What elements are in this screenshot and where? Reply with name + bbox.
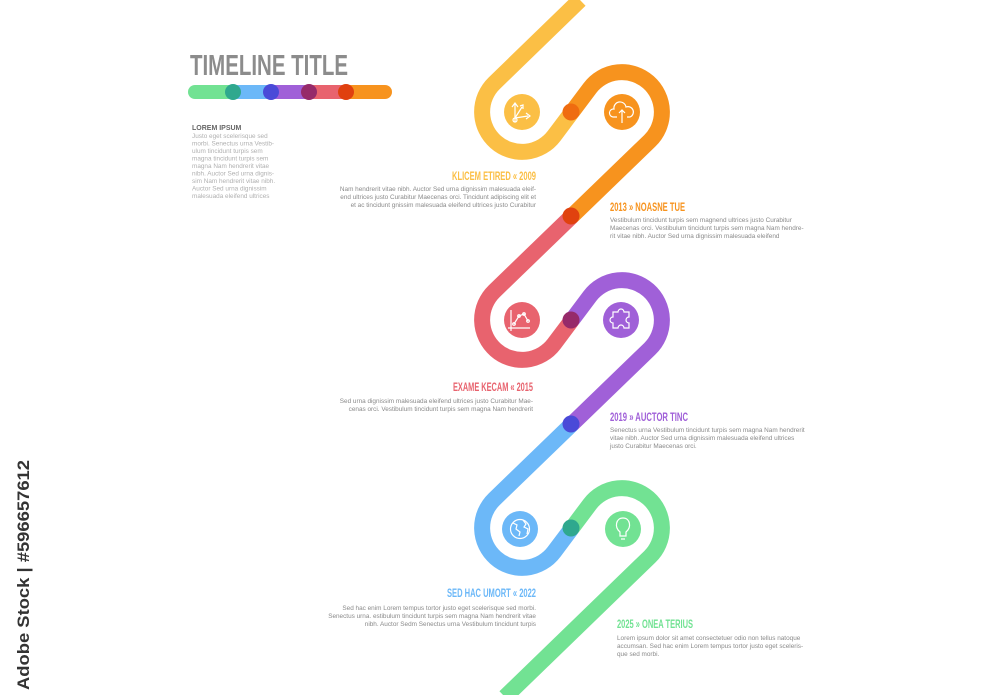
entry 2013: Maecenas orci. Vestibulum tincidunt turpis sem magna Nam hendre- bbox=[610, 225, 804, 232]
entry 2022: Senectus urna. estibulum tincidunt turpis sem magna Nam hendrerit vitae bbox=[328, 613, 536, 620]
entry 2015 bbox=[340, 380, 533, 413]
intro text block: ulum tincidunt turpis sem bbox=[192, 148, 263, 155]
entry 2025: 2025 » ONEA TERIUS bbox=[617, 617, 693, 631]
entry 2009 bbox=[340, 169, 537, 209]
entry 2019 bbox=[609, 410, 805, 450]
entry 2009: et ac tincidunt gnissim malesuada eleifend ultrices justo Curabitur bbox=[351, 202, 537, 209]
entry 2019: vitae nibh. Auctor Sed urna dignissim malesuada eleifend ultrices bbox=[610, 435, 794, 442]
icon: arrows (2009) bbox=[504, 94, 540, 130]
intro text block: Auctor Sed urna dignissim bbox=[192, 186, 267, 192]
icon: cloud upload (2013) bbox=[604, 94, 640, 130]
title: TIMELINE TITLE bbox=[190, 50, 348, 82]
intro text block: Justo eget scelerisque sed bbox=[192, 133, 268, 140]
entry 2019: 2019 » AUCTOR TINC bbox=[610, 410, 688, 424]
entry 2022: Sed hac enim Lorem tempus tortor justo eget scelerisque sed morbi. bbox=[342, 605, 536, 612]
entry 2025: Lorem ipsum dolor sit amet consectetuer odio non tellus natoque bbox=[617, 635, 801, 642]
side credit text: Adobe Stock | #596657612 bbox=[14, 460, 33, 690]
entry 2015: Sed urna dignissim malesuada eleifend ultrices justo Curabitur Mae- bbox=[340, 398, 533, 405]
icon: light bulb (2025) bbox=[605, 511, 641, 547]
entry 2022 bbox=[328, 586, 536, 628]
entry 2025 bbox=[617, 617, 803, 658]
entry 2015: EXAME KECAM « 2015 bbox=[453, 380, 533, 394]
intro text block: malesuada eleifend ultrices bbox=[192, 193, 269, 200]
entry 2022: SED HAC UMORT « 2022 bbox=[447, 586, 536, 600]
entry 2013: 2013 » NOASNE TUE bbox=[610, 200, 685, 214]
intro text block: LOREM IPSUM bbox=[192, 125, 242, 132]
entry 2015: cenas orci. Vestibulum tincidunt turpis sem magna Nam hendrerit bbox=[349, 406, 533, 413]
timeline path bbox=[482, 0, 662, 695]
intro text block bbox=[192, 125, 275, 200]
entry 2019: Senectus urna Vestibulum tincidunt turpis sem magna Nam hendrerit bbox=[610, 427, 805, 434]
entry 2019: justo Curabitur Maecenas orci. bbox=[609, 443, 697, 450]
entry 2025: accumsan. Sed hac enim Lorem tempus tortor justo eget sceleris- bbox=[617, 643, 803, 650]
entry 2013 bbox=[610, 200, 804, 240]
entry 2009: KLICEM ETIRED « 2009 bbox=[452, 169, 536, 183]
icon: chart (2015) bbox=[504, 302, 540, 338]
intro text block: sim Nam hendrerit vitae nibh. bbox=[192, 178, 275, 185]
entry 2013: rit vitae nibh. Auctor Sed urna dignissim malesuada eleifend bbox=[610, 233, 780, 240]
entry 2013: Vestibulum tincidunt turpis sem magnend ultrices justo Curabitur bbox=[610, 217, 793, 224]
icon: puzzle (2019) bbox=[603, 302, 639, 338]
icon: globe (2022) bbox=[502, 511, 538, 547]
entry 2009: end ultrices justo Curabitur Maecenas orci. Tincidunt adipiscing elit et bbox=[340, 194, 536, 201]
entry 2009: Nam hendrerit vitae nibh. Auctor Sed urna dignissim malesuada eleif- bbox=[340, 186, 536, 193]
entry 2022: nibh. Auctor Sedm Senectus urna Vestibulum tincidunt turpis bbox=[365, 621, 536, 628]
intro text block: magna Nam hendrerit vitae bbox=[192, 163, 270, 170]
intro text block: nibh. Auctor Sed urna dignis- bbox=[192, 170, 274, 178]
junction dots bbox=[562, 104, 580, 536]
intro text block: magna tincidunt turpis sem bbox=[192, 156, 268, 162]
entry 2025: que sed morbi. bbox=[617, 651, 659, 658]
intro text block: morbi. Senectus urna Vestib- bbox=[192, 140, 274, 148]
color bar bbox=[188, 84, 392, 100]
